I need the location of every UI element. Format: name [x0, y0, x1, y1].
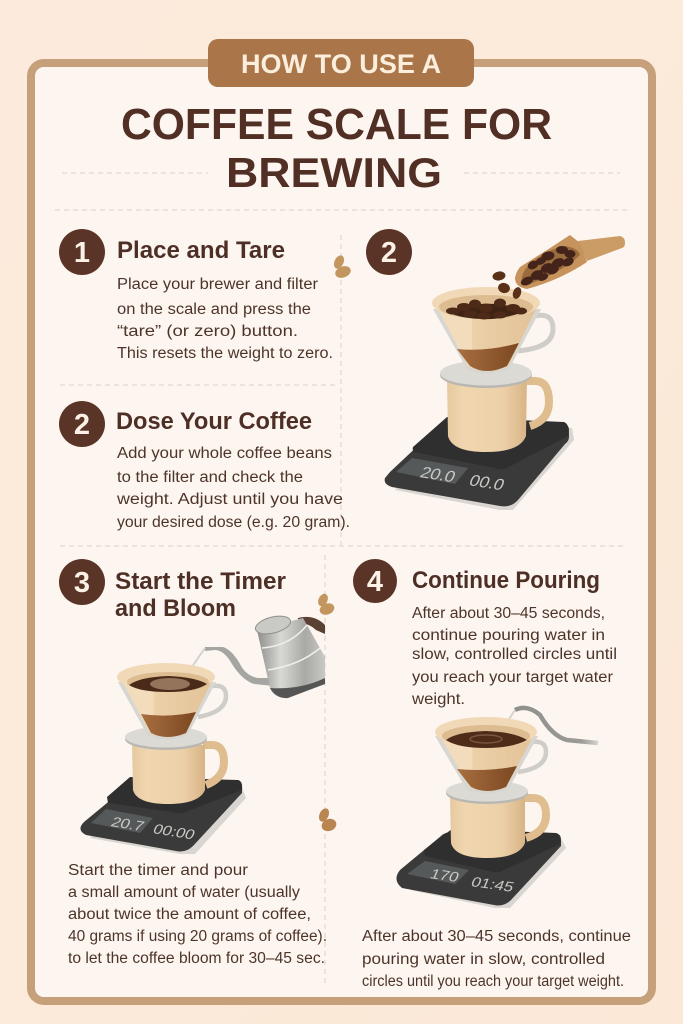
title: [121, 100, 552, 196]
step 4: continue pouring: weight.: [411, 691, 465, 708]
mug: [447, 378, 549, 452]
step 1: place and tare: on the scale and press the: [117, 301, 311, 318]
step 1: place and tare: This resets the weight to zero.: [117, 345, 333, 362]
title: COFFEE SCALE FOR: [121, 100, 552, 149]
scale: 00:00: [150, 822, 197, 843]
scale: [80, 777, 246, 854]
saucer: [446, 780, 528, 804]
step 2: dose your coffee: to the filter and check the: [117, 469, 303, 486]
step 4: continue pouring: 4: [367, 566, 383, 598]
number badge: illustration 2: 2: [381, 237, 397, 269]
step 4: continue pouring: pouring water in slow, controlled: [362, 951, 605, 968]
scale: 01:45: [468, 875, 516, 896]
step 2: dose your coffee: 2: [74, 409, 90, 441]
step 1: place and tare: “tare” (or zero) button.: [117, 323, 298, 340]
saucer: [125, 726, 207, 750]
step 3: start the timer and bloom: about twice the amount of coffee,: [68, 906, 311, 923]
step 1: place and tare: Place your brewer and filter: [117, 276, 318, 293]
illustration: dripper with beans on scale: [385, 235, 625, 510]
dripper: [117, 663, 226, 740]
step 3: start the timer and bloom: to let the coffee bloom for 30–45 sec.: [68, 950, 325, 967]
mug: [450, 797, 546, 858]
step 3: start the timer and bloom: 3: [74, 567, 90, 599]
step 2: dose your coffee: Add your whole coffee beans: [117, 445, 332, 462]
badge: how to use a: HOW TO USE A: [241, 49, 441, 79]
badge: how to use a: [208, 39, 474, 87]
scale: [396, 829, 566, 908]
step 4: continue pouring: [353, 559, 631, 990]
scale: 20.0: [417, 464, 458, 486]
scale: 20.7: [108, 815, 146, 835]
step 4: continue pouring: After about 30–45 seconds,: [412, 605, 605, 622]
illustration: bloom on scale with kettle: [80, 613, 325, 854]
step 3: start the timer and bloom: Start the timer and pour: [68, 862, 248, 879]
kettle spout: [497, 708, 598, 743]
mug: [132, 745, 224, 804]
step 3: start the timer and bloom: and Bloom: [115, 595, 236, 622]
number badge: illustration 2: [366, 229, 412, 275]
icon: coffee beans divider middle: [316, 592, 336, 617]
scale: [385, 417, 574, 510]
saucer: [440, 360, 532, 388]
step 4: continue pouring: you reach your target water: [412, 669, 613, 686]
step 1: place and tare: [59, 229, 333, 362]
scale: 170: [427, 867, 461, 886]
scoop: [515, 235, 625, 289]
step 2: dose your coffee: weight. Adjust until you have: [116, 491, 343, 508]
step 2: dose your coffee: your desired dose (e.g. 20 gram).: [117, 514, 350, 531]
illustration: continued pour on scale: [396, 708, 598, 908]
icon: coffee beans divider top: [332, 254, 352, 280]
dripper: [435, 717, 546, 794]
step 1: place and tare: 1: [74, 237, 90, 269]
step 4: continue pouring: circles until you reach your target weight.: [362, 973, 624, 990]
step 2: dose your coffee: [59, 401, 350, 531]
step 2: dose your coffee: Dose Your Coffee: [116, 408, 312, 435]
dripper: [432, 287, 553, 374]
title: BREWING: [226, 149, 442, 196]
step 4: continue pouring: slow, controlled circles until: [412, 646, 617, 663]
step 3: start the timer and bloom: [59, 559, 327, 967]
step 3: start the timer and bloom: 40 grams if using 20 grams of coffee).: [68, 928, 327, 945]
step 3: start the timer and bloom: Start the Timer: [115, 568, 286, 595]
coffee beans in dripper: [446, 298, 527, 320]
falling beans: [492, 270, 523, 300]
step 4: continue pouring: continue pouring water in: [412, 627, 605, 644]
kettle: [187, 613, 325, 698]
step 4: continue pouring: Continue Pouring: [412, 567, 600, 594]
icon: coffee beans divider lower: [317, 807, 338, 833]
step 4: continue pouring: After about 30–45 seconds, continue: [362, 928, 631, 945]
step 3: start the timer and bloom: a small amount of water (usually: [68, 884, 300, 901]
step 1: place and tare: Place and Tare: [117, 237, 285, 264]
scale: 00.0: [466, 472, 507, 494]
